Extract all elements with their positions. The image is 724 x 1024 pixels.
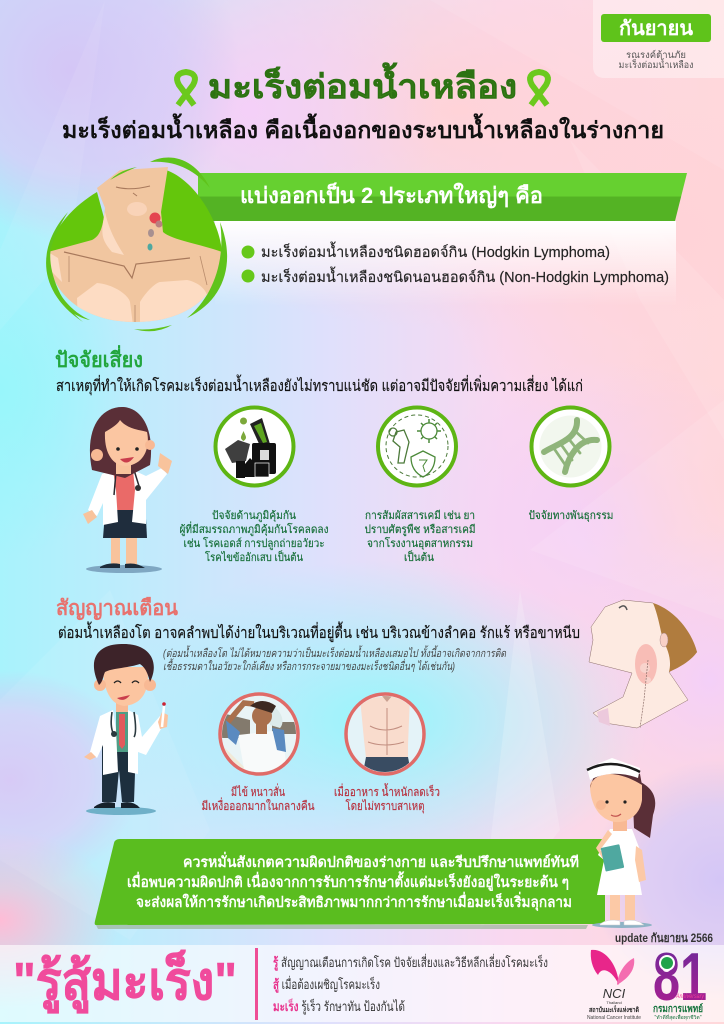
green banner: แบ่งออกเป็น 2 ประเภทใหญ่ๆ คือ (240, 181, 543, 209)
caption: ปัจจัยทางพันธุกรรม (528, 510, 614, 522)
subtitle: มะเร็งต่อมน้ำเหลือง คือเนื้องอกของระบบน้ำเหลืองในร่างกาย (62, 113, 664, 143)
note: swollen nodes: เชื้อธรรมดาในอวัยวะใกล้เคียง หรือการกระจายมาของมะเร็งชนิดอื่นๆ ได้เช่นกัน) (163, 658, 455, 673)
icon: thin torso (346, 694, 424, 778)
type 2 bullet: มะเร็งต่อมน้ำเหลืองชนิดนอนฮอดจ์กิน (Non-Hodgkin Lymphoma) (261, 266, 669, 286)
caption: ผู้ที่มีสมรรถภาพภูมิคุ้มกันโรคลดลง (180, 521, 328, 536)
note: swollen nodes (163, 645, 507, 673)
slogan explanation: รู้ สัญญาณเตือนการเกิดโรค ปัจจัยเสี่ยงและวิธีหลีกเลี่ยงโรคมะเร็ง (273, 953, 548, 971)
title: มะเร็งต่อมน้ำเหลือง (208, 62, 517, 105)
logo: Department of Medical Services 81st: Anniversary (675, 994, 705, 1000)
callout: see a doctor: จะส่งผลให้การรักษาเกิดประสิทธิภาพมากกว่าการรักษาเมื่อมะเร็งเริ่มลุกลาม (136, 891, 572, 911)
heading: risk factors: ปัจจัยเสี่ยง (55, 344, 143, 372)
illustration: female doctor (83, 407, 172, 573)
caption (180, 510, 328, 564)
caption (202, 783, 314, 813)
campaign caption: มะเร็งต่อมน้ำเหลือง (618, 58, 694, 71)
illustration: male doctor (84, 644, 168, 815)
caption (334, 783, 440, 814)
text: warning sign intro: ต่อมน้ำเหลืองโต อาจคลำพบได้ง่ายในบริเวณที่อยู่ตื้น เช่น บริเวณข้างลำคอ รักแร้ หรือขาหนีบ (58, 621, 580, 643)
icon: DNA helix (532, 408, 610, 486)
month tag card (593, 0, 724, 78)
caption (364, 509, 476, 564)
caption: เช่น โรคเอดส์ การปลูกถ่ายอวัยวะ (184, 536, 324, 550)
type 1 bullet: มะเร็งต่อมน้ำเหลืองชนิดฮอดจ์กิน (Hodgkin Lymphoma) (261, 241, 610, 261)
callout: see a doctor (95, 839, 605, 929)
icon: green ribbon left (177, 72, 195, 105)
note: swollen nodes: (ต่อมน้ำเหลืองโต ไม่ได้หมายความว่าเป็นมะเร็งต่อมน้ำเหลืองเสมอไป ทั้งนี้อาจเกิดจากการติด (163, 645, 507, 660)
logo: National Cancer Institute: Thailand (606, 1000, 622, 1005)
text: risk factor intro: สาเหตุที่ทำให้เกิดโรคมะเร็งต่อมน้ำเหลืองยังไม่ทราบแน่ชัด แต่อาจมีปัจจัยที่เพิ่มความเสี่ยง ได้แก่ (56, 374, 583, 396)
campaign caption: รณรงค์ต้านภัย (626, 49, 686, 61)
illustration: nurse (587, 758, 655, 928)
risk factor 2 (364, 408, 476, 564)
swooshes (46, 212, 83, 322)
icon: green ribbon right (530, 72, 548, 105)
white list panel (215, 221, 676, 306)
caption: โดยไม่ทราบสาเหตุ (346, 799, 424, 814)
illustration: neck and chest with lymph nodes (45, 158, 227, 331)
lymph nodes (150, 212, 160, 224)
caption: ปัจจัยด้านภูมิคุ้มกัน (212, 510, 296, 522)
icon: virus, person and shield (378, 408, 456, 486)
warning sign 1 (202, 694, 314, 813)
logo: National Cancer Institute: National Cancer Institute (587, 1015, 641, 1021)
panel: lymphoma types (198, 173, 687, 306)
caption: ปราบศัตรูพืช หรือสารเคมี (364, 523, 476, 536)
caption: มีไข้ หนาวสั่น (231, 783, 285, 799)
divider bar (255, 948, 258, 1020)
slogan explanation: มะเร็ง รู้เร็ว รักษาทัน ป้องกันได้ (273, 997, 405, 1015)
footer band (0, 939, 724, 1022)
logo: Department of Medical Services 81st: กรมการแพทย์ (653, 1003, 703, 1015)
title (177, 62, 548, 105)
caption: เป็นต้น (404, 550, 434, 564)
slogan explanation: สู้ เมื่อต้องเผชิญโรคมะเร็ง (273, 975, 380, 993)
caption: จากโรงงานอุตสาหกรรม (367, 536, 473, 550)
logo: National Cancer Institute: สถาบันมะเร็งแห่งชาติ (589, 1005, 639, 1014)
month tag button: กันยายน (619, 18, 693, 40)
logo: Department of Medical Services 81st: "ทำดีที่สุดเพื่อทุกชีวิต" (654, 1014, 702, 1021)
heading: warning signs: สัญญาณเตือน (56, 596, 179, 621)
risk factor 1 (180, 408, 328, 564)
campaign caption (618, 49, 694, 71)
logo: National Cancer Institute: NCI (603, 986, 626, 1001)
caption: การสัมผัสสารเคมี เช่น ยา (365, 509, 475, 522)
caption: มีเหงื่อออกมากในกลางคืน (202, 797, 314, 813)
warning sign 2 (334, 694, 440, 814)
slogan: "รู้สู้มะเร็ง" (13, 950, 237, 1014)
risk factor 3 (528, 408, 614, 522)
green banner (198, 173, 687, 221)
callout: see a doctor: ควรหมั่นสังเกตความผิดปกติของร่างกาย และรีบปรึกษาแพทย์ทันที (183, 851, 579, 871)
caption: เมื่ออาหาร น้ำหนักลดเร็ว (334, 783, 440, 799)
slogan explanation (273, 953, 548, 1015)
illustration: swollen neck nodes (589, 600, 697, 728)
icon: man with fever (218, 694, 300, 780)
callout: see a doctor: เมื่อพบความผิดปกติ เนื่องจากการรับการรักษาตั้งแต่มะเร็งยังอยู่ในระยะต้น ๆ (127, 871, 569, 891)
icon: chemicals and immunity (216, 408, 294, 486)
logo: National Cancer Institute (587, 950, 641, 1021)
green egg backdrop (48, 170, 222, 262)
caption: โรคไขข้ออักเสบ เป็นต้น (205, 550, 303, 564)
